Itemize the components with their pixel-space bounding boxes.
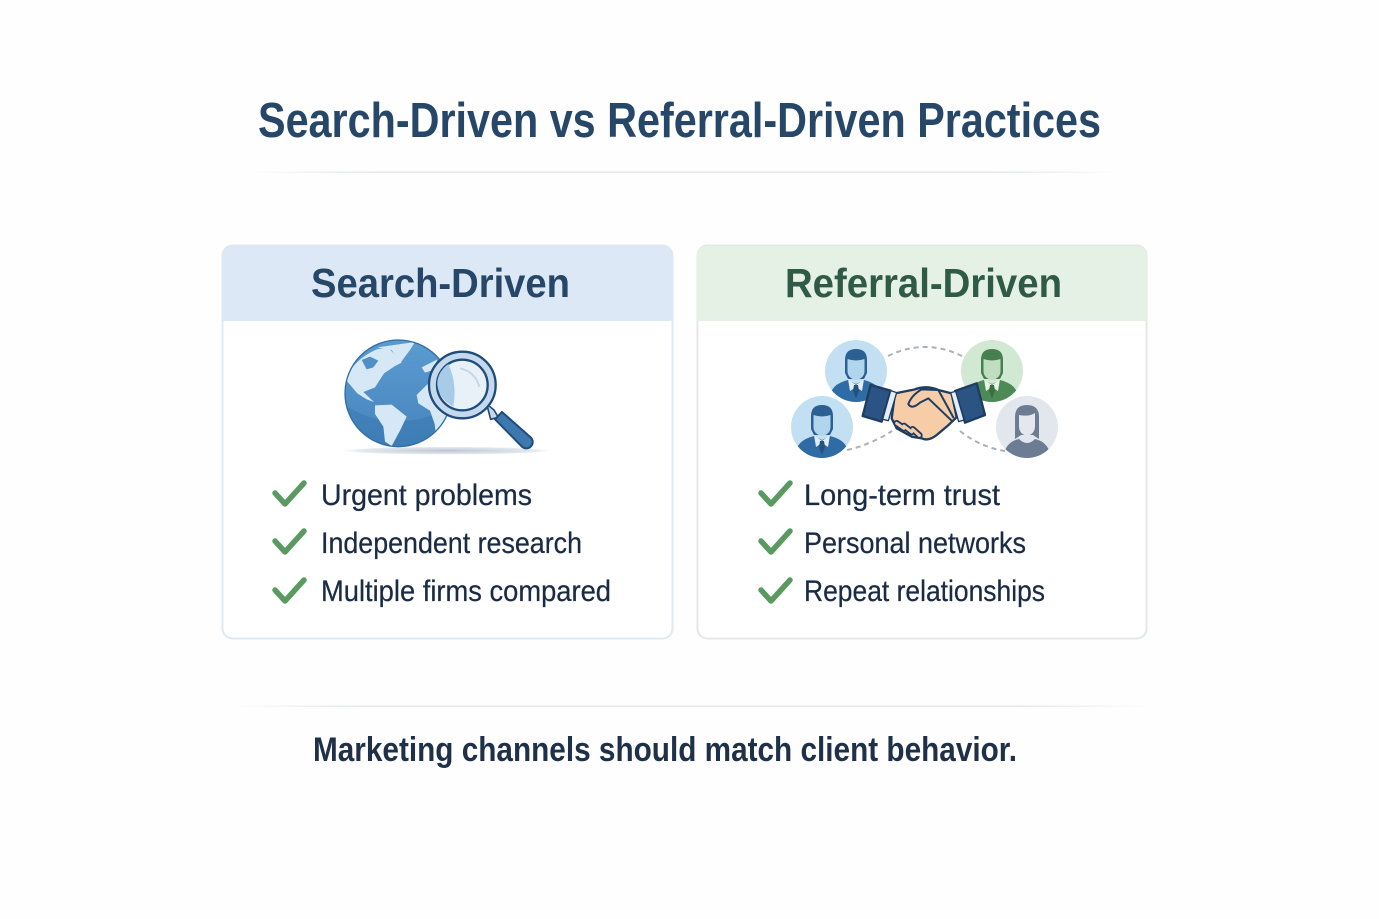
takeaway: Marketing channels should match client behavior. [313,731,1017,769]
icon: check [275,580,304,601]
referral-driven header [697,246,1147,321]
icon: network handshake [791,340,1058,458]
icon: globe with magnifying glass [343,340,551,455]
icon: check [761,531,790,552]
search-driven checklist [275,479,611,608]
handshake [863,383,985,439]
item: Independent research [321,527,582,560]
person: top right [961,340,1023,402]
item: Personal networks [804,527,1026,560]
search-driven heading: Search-Driven [311,260,570,306]
panel: search-driven [222,246,673,638]
person: bottom right [996,396,1058,458]
item: Urgent problems [321,479,532,512]
search-driven header [222,246,673,321]
referral-driven checklist [761,479,1045,608]
icon: check [275,483,304,504]
icon: check [761,483,790,504]
person: top left [825,340,887,402]
referral-driven heading: Referral-Driven [785,260,1062,306]
title: Search-Driven vs Referral-Driven Practices [258,94,1101,148]
person: bottom left [791,396,853,458]
icon: check [275,531,304,552]
item: Long-term trust [804,479,1001,512]
icon: check [761,580,790,601]
item: Repeat relationships [804,575,1045,608]
panel: referral-driven [697,246,1147,638]
item: Multiple firms compared [321,575,611,608]
